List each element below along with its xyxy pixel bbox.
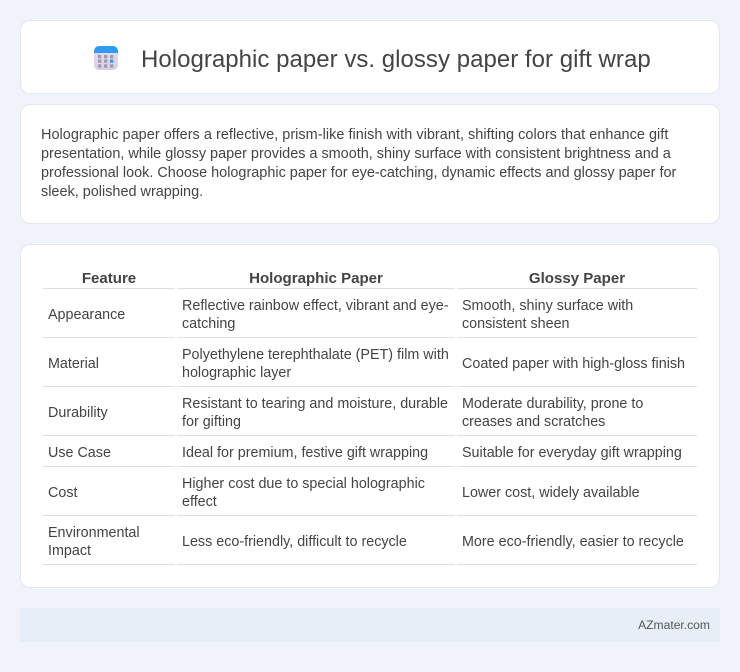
row: environmental impact xyxy=(43,525,697,565)
comparison table xyxy=(43,270,697,565)
intro paragraph xyxy=(41,127,676,200)
row: durability xyxy=(43,396,697,436)
footer bar xyxy=(20,608,720,642)
row: durability: Resistant to tearing and moisture, durable xyxy=(182,396,448,412)
row: use case: Suitable for everyday gift wrapping xyxy=(462,445,682,461)
row: durability: for gifting xyxy=(182,414,241,430)
intro text panel xyxy=(20,104,720,224)
row: material: Material xyxy=(48,356,99,372)
row: appearance: Smooth, shiny surface with xyxy=(462,298,633,314)
row: durability: creases and scratches xyxy=(462,414,605,430)
row: cost: Cost xyxy=(48,485,77,501)
intro paragraph: Holographic paper offers a reflective, prism-like finish with vibrant, shifting colors that enhance gift xyxy=(41,127,668,143)
row: use case: Ideal for premium, festive gift wrapping xyxy=(182,445,428,461)
footer credit: AZmater.com xyxy=(638,618,710,632)
table header xyxy=(43,270,697,289)
row: environmental impact: Environmental xyxy=(48,525,140,541)
row: durability: Durability xyxy=(48,405,108,421)
row: material: holographic layer xyxy=(182,365,291,381)
row: use case xyxy=(43,445,697,467)
row: cost: Lower cost, widely available xyxy=(462,485,640,501)
icon: calendar xyxy=(94,46,118,70)
row: durability: Moderate durability, prone to xyxy=(462,396,643,412)
intro paragraph: sleek, polished wrapping. xyxy=(41,184,203,200)
intro paragraph: professional look. Choose holographic paper for eye-catching, dynamic effects and glossy paper for xyxy=(41,165,676,181)
intro paragraph: presentation, while glossy paper provides a smooth, shiny surface with consistent brightness and a xyxy=(41,146,671,162)
comparison table panel xyxy=(20,244,720,588)
row: appearance: catching xyxy=(182,316,235,332)
table header: Feature xyxy=(82,270,136,287)
title: Holographic paper vs. glossy paper for gift wrap xyxy=(141,46,651,73)
row: appearance: consistent sheen xyxy=(462,316,570,332)
row: material xyxy=(43,347,697,387)
row: cost: effect xyxy=(182,494,217,510)
row: material: Coated paper with high-gloss finish xyxy=(462,356,685,372)
row: environmental impact: Less eco-friendly, difficult to recycle xyxy=(182,534,407,550)
row: appearance: Appearance xyxy=(48,307,125,323)
row: appearance: Reflective rainbow effect, vibrant and eye- xyxy=(182,298,449,314)
table header: Holographic Paper xyxy=(249,270,383,287)
row: use case: Use Case xyxy=(48,445,111,461)
row: material: Polyethylene terephthalate (PET) film with xyxy=(182,347,449,363)
row: cost: Higher cost due to special holographic xyxy=(182,476,425,492)
header panel xyxy=(20,20,720,94)
row: appearance xyxy=(43,298,697,338)
row: environmental impact: Impact xyxy=(48,543,91,559)
table header: Glossy Paper xyxy=(529,270,625,287)
row: environmental impact: More eco-friendly, easier to recycle xyxy=(462,534,684,550)
row: cost xyxy=(43,476,697,516)
